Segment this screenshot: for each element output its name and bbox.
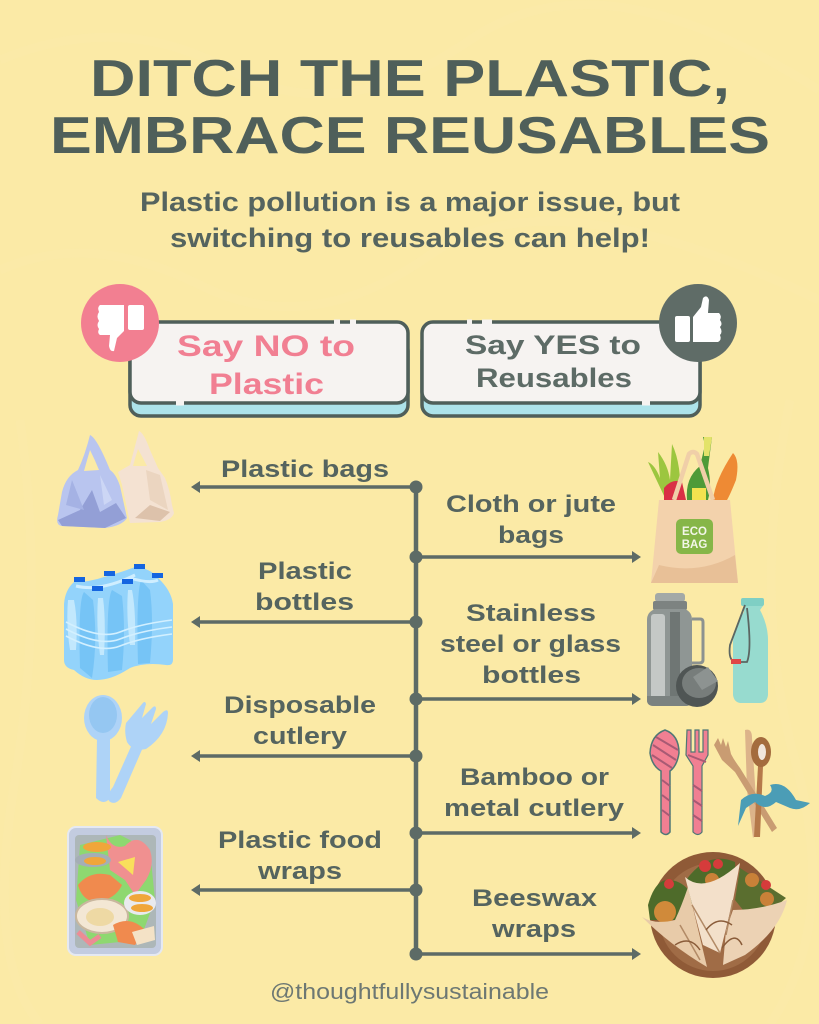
- icon: eco bag: [648, 437, 738, 583]
- heading: say no: [177, 330, 355, 401]
- icon: eco bag: ECO: [682, 526, 707, 538]
- labels: plastic items: wraps: [257, 858, 342, 885]
- footer handle: @thoughtfullysustainable: [270, 979, 549, 1004]
- labels: reusable items: bottles: [482, 662, 581, 689]
- subtitle: Plastic pollution is a major issue, but: [140, 187, 680, 217]
- title: EMBRACE REUSABLES: [50, 107, 770, 165]
- icon: striped pink cutlery: [650, 730, 708, 834]
- labels: reusable items: Cloth or jute: [446, 491, 616, 518]
- labels: reusable items: wraps: [491, 916, 576, 943]
- labels: reusable items: steel or glass: [440, 631, 621, 658]
- icon: plastic bottles: [64, 564, 173, 680]
- heading: say yes: Say YES to: [465, 330, 641, 360]
- labels: plastic items: bottles: [255, 589, 354, 616]
- icon: steel bottle and glass bottle: [647, 593, 768, 707]
- arrow: plastic bags: [191, 480, 422, 494]
- arrow: bamboo cutlery: [410, 826, 641, 840]
- labels: reusable items: Bamboo or: [460, 764, 609, 791]
- heading: say no: Plastic: [209, 368, 324, 401]
- arrow: plastic food wraps: [191, 884, 422, 896]
- heading: say no: Say NO to: [177, 330, 355, 363]
- subtitle: switching to reusables can help!: [170, 223, 650, 253]
- labels: reusable items: bags: [498, 522, 564, 549]
- labels: plastic items: cutlery: [253, 723, 348, 750]
- labels: plastic items: Plastic bags: [221, 456, 389, 483]
- icon: metal cutlery with ribbon: [714, 730, 810, 838]
- labels: plastic items: Plastic food: [218, 827, 382, 854]
- icon: disposable cutlery: [84, 695, 168, 803]
- labels: reusable items: Beeswax: [472, 885, 598, 912]
- title: DITCH THE PLASTIC,: [90, 50, 730, 108]
- arrow: steel bottles: [410, 692, 641, 706]
- labels: plastic items: [218, 456, 389, 885]
- icon: thumbs up: [659, 284, 737, 362]
- icon: eco bag: BAG: [682, 539, 707, 551]
- icon: plastic bags: [57, 431, 174, 528]
- icon: thumbs down: [81, 284, 159, 362]
- labels: plastic items: Plastic: [258, 558, 352, 585]
- arrow: plastic bottles: [191, 616, 422, 628]
- labels: reusable items: [440, 491, 625, 943]
- subtitle: [140, 187, 680, 253]
- arrow: disposable cutlery: [191, 750, 422, 762]
- arrow: beeswax wraps: [410, 948, 641, 960]
- labels: plastic items: Disposable: [224, 692, 376, 719]
- arrow: cloth bags: [410, 550, 641, 564]
- panel: say yes to reusables: [422, 284, 737, 416]
- heading: say yes: [465, 330, 641, 393]
- icon: plastic food wrap tray: [68, 827, 162, 955]
- panel: say no to plastic: [81, 284, 408, 416]
- title: [50, 50, 770, 165]
- labels: reusable items: metal cutlery: [444, 795, 625, 822]
- heading: say yes: Reusables: [476, 363, 632, 393]
- icon: beeswax wraps on plate: [642, 852, 787, 978]
- labels: reusable items: Stainless: [466, 600, 596, 627]
- timeline: spine and arrows: [191, 480, 641, 960]
